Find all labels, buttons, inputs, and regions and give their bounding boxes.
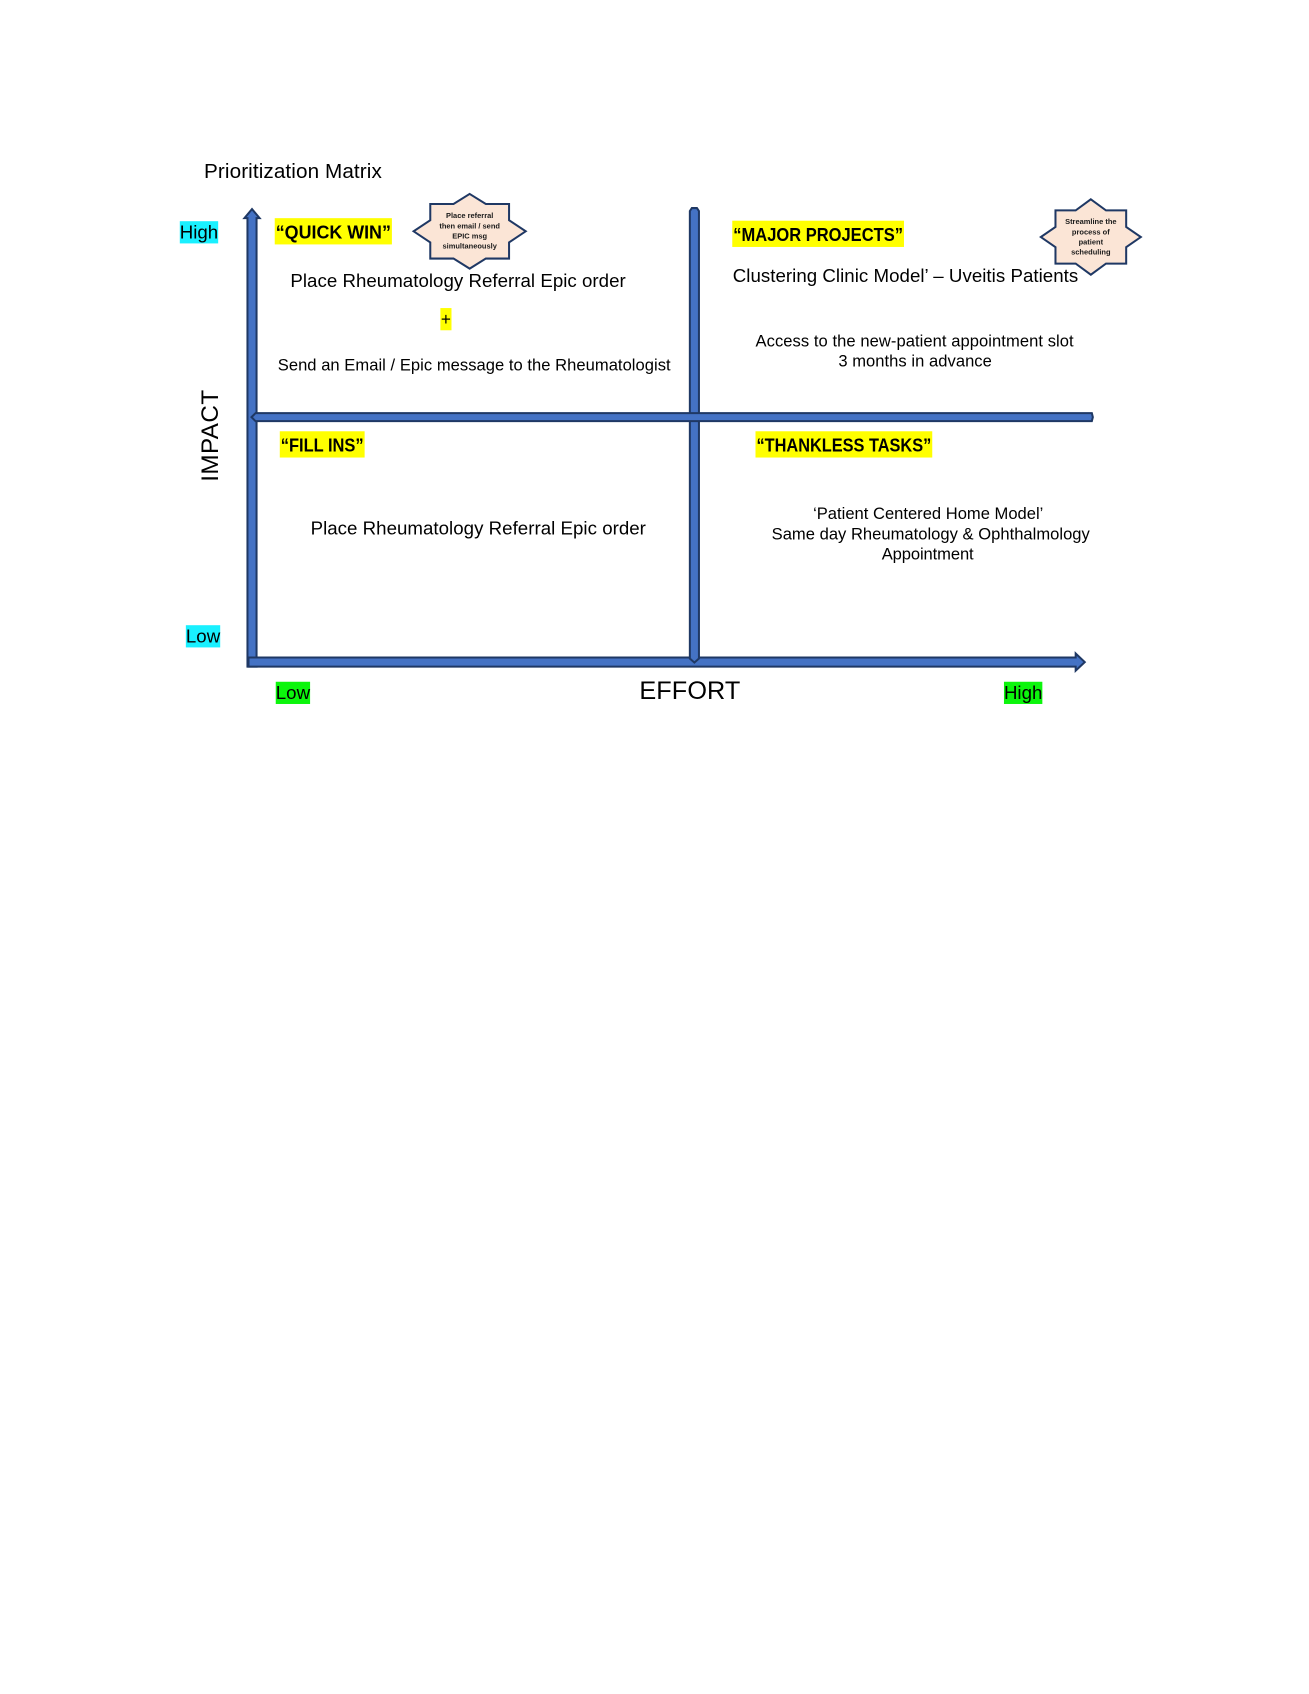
text: appointment access (756, 331, 1074, 371)
text: send email: Send an Email / Epic message to the Rheumatologist (278, 356, 671, 375)
axis label: effort: EFFORT (639, 677, 740, 705)
callout: streamline star (1041, 199, 1141, 275)
divider: vertical quadrant bar (690, 208, 699, 663)
title: Prioritization Matrix (204, 160, 382, 183)
text: patient centered home: ‘Patient Centered Home Model’ (813, 504, 1043, 523)
divider: horizontal quadrant bar (252, 413, 1093, 421)
text: rheumatology referral: Place Rheumatology Referral Epic order (290, 270, 626, 291)
text: rheumatology referral: Place Rheumatology Referral Epic order (311, 517, 646, 538)
axis label: impact: IMPACT (197, 390, 224, 482)
quadrant: quick win (275, 194, 671, 375)
effort low label: Low (276, 682, 311, 703)
quadrant: major projects (732, 199, 1141, 371)
arrow: effort axis (248, 653, 1085, 671)
callout: streamline star: patient (1079, 237, 1104, 246)
text: patient centered home: Appointment (882, 545, 974, 564)
callout: quick win star: then email / send (439, 221, 500, 230)
callout: quick win star: Place referral (446, 211, 493, 220)
callout: streamline star: Streamline the (1065, 217, 1117, 226)
text: patient centered home (772, 504, 1091, 564)
callout: quick win star: EPIC msg (452, 231, 488, 240)
callout: streamline star: process of (1072, 227, 1110, 236)
heading: major projects: “MAJOR PROJECTS” (733, 225, 903, 245)
arrow: impact axis (244, 209, 260, 667)
quadrant: fill ins (280, 431, 646, 538)
callout: quick win star (414, 194, 526, 269)
callout: streamline star: scheduling (1071, 248, 1111, 257)
impact high label: High (180, 221, 218, 242)
heading: quick win: “QUICK WIN” (276, 222, 391, 242)
text: appointment access: 3 months in advance (838, 352, 992, 371)
text: appointment access: Access to the new-patient appointment slot (756, 331, 1074, 350)
effort high label: High (1004, 682, 1042, 703)
quadrant: thankless tasks (756, 431, 1091, 564)
text: clustering clinic: Clustering Clinic Model’ – Uveitis Patients (733, 265, 1078, 286)
plus sign: + (441, 309, 451, 329)
text: patient centered home: Same day Rheumatology & Ophthalmology (772, 524, 1091, 543)
callout: quick win star: simultaneously (442, 241, 498, 250)
impact low label: Low (186, 625, 221, 646)
heading: fill ins: “FILL INS” (281, 435, 364, 455)
heading: thankless tasks: “THANKLESS TASKS” (757, 435, 931, 455)
